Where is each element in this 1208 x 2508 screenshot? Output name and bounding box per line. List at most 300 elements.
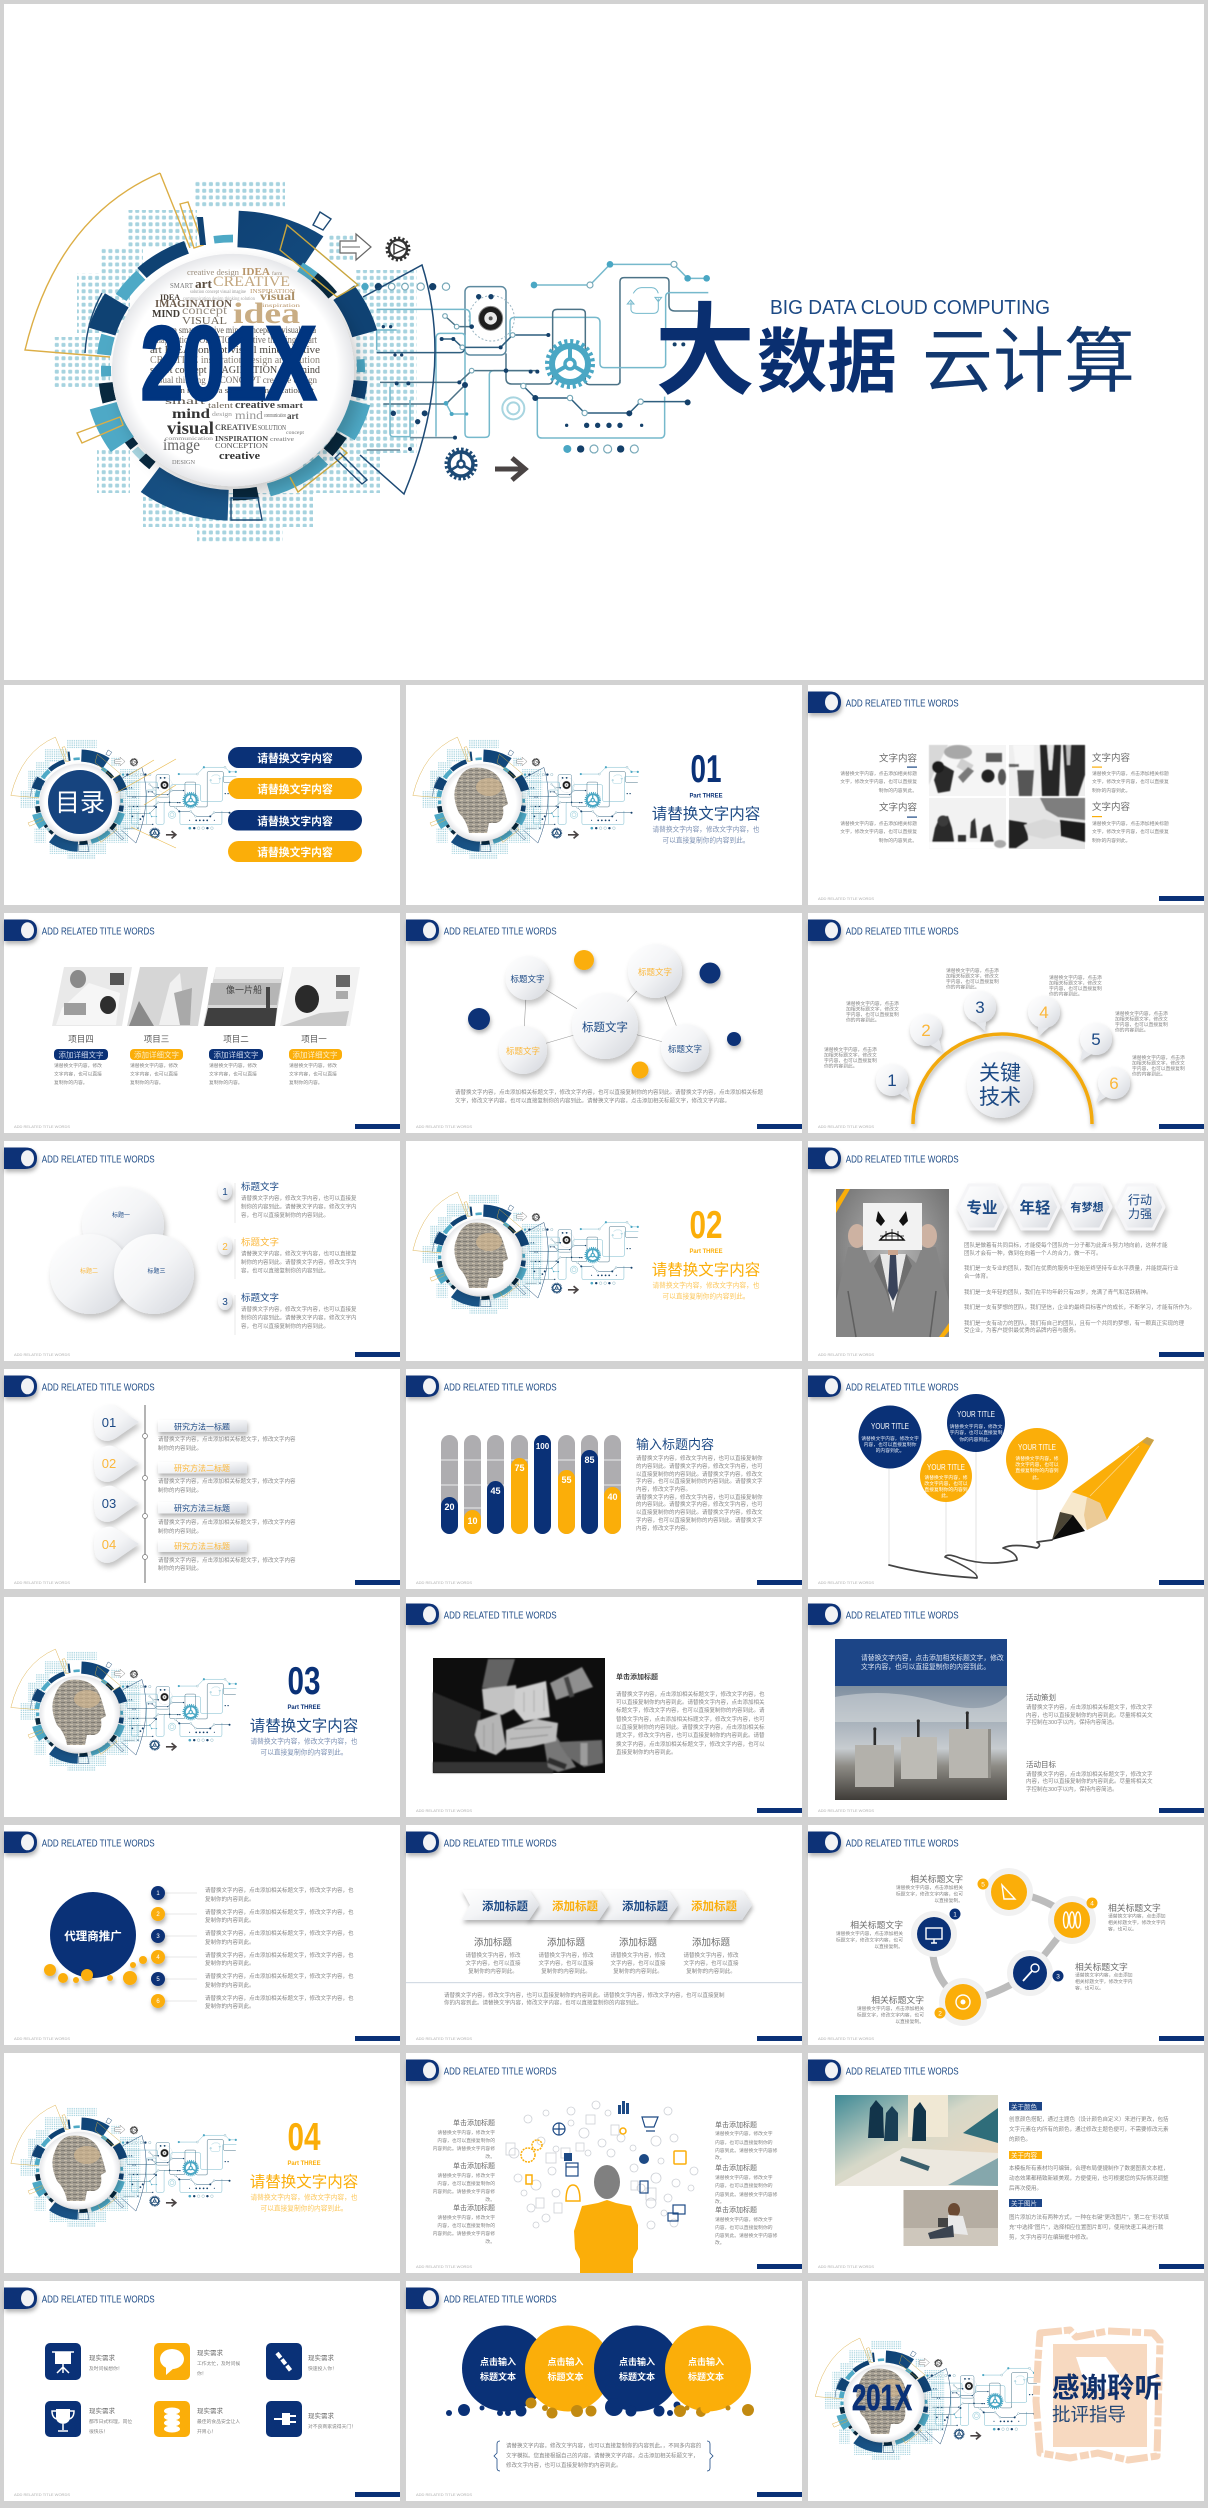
circle one: 标题一 [112, 1211, 130, 1219]
footer bar [355, 1124, 400, 1129]
word cloud: communication design thinking solution [183, 297, 255, 302]
chart paragraph: 字内容，也可以直接复制你的内容到此。请替换文字 [636, 1516, 763, 1524]
word cloud: IMAGINATION [155, 298, 232, 310]
icon cloud [506, 2101, 698, 2229]
label 5 [896, 1873, 963, 1904]
balloon text 1: 字内容，也可以直接复制 [824, 1057, 877, 1064]
label 5: 请替换文字内容，点击添加相关 [896, 1884, 963, 1891]
left text 1: 改。 [485, 2153, 495, 2160]
balloon text 2 [846, 1000, 899, 1024]
left text 2: 内容到此。请替换文字内容修 [433, 2188, 495, 2195]
list item 6: 6 [156, 1999, 160, 2005]
left text 2: 改。 [485, 2196, 495, 2203]
slide 1: contents [4, 685, 400, 905]
footer bar [1159, 1124, 1204, 1129]
photo: office silhouettes [835, 2095, 998, 2186]
project 2: 文字内容，也可以直接 [130, 1070, 178, 1078]
contents pill 2 [228, 778, 362, 799]
right text 1: 内容，也可以直接复制你的 [715, 2139, 773, 2146]
project 3: 项目二 [223, 1034, 249, 1044]
paragraph 1 [1009, 2115, 1169, 2143]
balloon text 3: 你的内容到此。 [946, 984, 980, 990]
right text block 1: 制你的内容到此。 [1092, 787, 1130, 794]
tag 01 [94, 1405, 139, 1441]
list item 1: 1 [156, 1891, 160, 1897]
footer text: ADD RELATED TITLE WORDS [416, 1809, 473, 1813]
word cloud: smart concept IMAGINATION idea mind [150, 365, 320, 376]
project 4: 文字内容，也可以直接 [289, 1070, 337, 1078]
right text block 2: 制你的内容到此。 [1092, 837, 1130, 844]
footer text: ADD RELATED TITLE WORDS [818, 2265, 875, 2269]
header title: ADD RELATED TITLE WORDS [846, 1382, 959, 1394]
bar chart: 55 [561, 1475, 572, 1485]
word cloud: concept [182, 303, 228, 317]
node 2: 2 [938, 2010, 942, 2018]
paragraph [616, 1690, 765, 1756]
circle title 1: 内容，也可以直接复制你 [864, 1441, 917, 1448]
slide 17: chevron process [406, 1825, 802, 2045]
bar chart: 45 [490, 1486, 501, 1496]
footer bar [757, 2036, 802, 2041]
left text 3: 单击添加标题 [453, 2203, 495, 2212]
balloon text 6: 字内容，也可以直接复制 [1132, 1065, 1185, 1072]
word cloud: art IDEA concept visual mind creative [150, 344, 320, 356]
circle labels: 点击输入 [547, 2356, 584, 2367]
need 4: 都市日式料理，岗位 [89, 2418, 132, 2425]
word cloud: INSPIRATION [215, 435, 268, 443]
paragraph [455, 1088, 764, 1104]
node 5: 5 [981, 1882, 985, 1888]
paragraph: 我们是一支年轻的团队，我们在平均年龄只有28岁，充满了青气和活跃精神。 [964, 1288, 1152, 1296]
column 2: 请替换文字内容，修改 [538, 1951, 594, 1959]
word cloud: concept [286, 430, 304, 436]
label 1: 相关标题文字 [850, 1919, 903, 1930]
method 2: 请替换文字内容，点击添加相关标题文字，修改文字内容 [158, 1477, 296, 1485]
project 1: 添加详细文字 [58, 1050, 104, 1060]
word cloud: solution concept visual imagine [190, 290, 247, 295]
word cloud: idea [233, 297, 300, 330]
thank you heading: 感谢聆听 [1052, 2372, 1162, 2403]
section title: 请替换文字内容 [652, 805, 760, 823]
right text 2: 请替换文字内容，修改文字 [715, 2174, 773, 2181]
circle one [82, 1187, 164, 1263]
header title: ADD RELATED TITLE WORDS [846, 698, 959, 710]
chevron 1 [462, 1890, 539, 1920]
word cloud: visual thinking art CONCEPT creative design [152, 375, 317, 385]
chart paragraph: 内容，修改文字内容。 [636, 1485, 691, 1493]
left text 3: 内容，也可以直接复制你的 [437, 2222, 495, 2229]
node 1 [911, 1908, 960, 1957]
person silhouette [574, 2165, 638, 2273]
word cloud: visual [167, 418, 214, 438]
left text 1: 内容到此。请替换文字内容修 [433, 2145, 495, 2152]
project 3: 添加详细文字 [214, 1050, 258, 1060]
method 4: 请替换文字内容，点击添加相关标题文字，修改文字内容 [158, 1556, 296, 1564]
text block: target: 字控制在300字以内，保持内容简洁。 [1026, 1785, 1118, 1793]
left text 1: 单击添加标题 [453, 2118, 495, 2127]
header title: ADD RELATED TITLE WORDS [846, 1154, 959, 1166]
project 2: 项目三 [144, 1034, 169, 1044]
word cloud: design [212, 412, 232, 418]
right text 1: 请替换文字内容，修改文字 [715, 2130, 773, 2137]
header [808, 2060, 841, 2081]
contents pill 1: 请替换文字内容 [257, 751, 333, 765]
title: 大数据 云计算: 数据 [757, 323, 897, 401]
footer text: ADD RELATED TITLE WORDS [14, 1125, 71, 1129]
word cloud: CREATIVE [213, 274, 290, 290]
label 1 [836, 1919, 903, 1950]
word cloud: design smart creative mind concept art visual idea [156, 325, 316, 335]
header [4, 2288, 37, 2309]
label 3: 相关标题文字，修改文字内 [1075, 1978, 1133, 1985]
circle labels: 点击输入 [688, 2356, 724, 2367]
circle two: 标题二 [80, 1267, 98, 1275]
header title: ADD RELATED TITLE WORDS [444, 1382, 557, 1394]
photo: pillars [835, 1686, 1007, 1800]
need 1 [89, 2353, 123, 2372]
hexagon: professional: 专业 [966, 1199, 998, 1217]
word cloud: SOLUTION [258, 424, 286, 432]
hero hub graphic [25, 173, 710, 543]
need 1: 及时问候想你！ [89, 2365, 123, 2372]
slide 12: pencil and circles [808, 1369, 1204, 1589]
header title: ADD RELATED TITLE WORDS [444, 2066, 557, 2078]
balloon text 1: 加相关标题文字，修改文 [824, 1052, 877, 1058]
tag: about pictures [1009, 2199, 1042, 2208]
footer text: ADD RELATED TITLE WORDS [818, 1809, 875, 1813]
footer bar [757, 2492, 802, 2497]
method 3: 制你的内容到此。 [158, 1527, 202, 1535]
word cloud: talent [208, 401, 234, 410]
paragraph: 你的内容到此。请替换文字内容，修改文字内容，也可以直接复制你的内容到此。 [444, 1998, 642, 2006]
slide 22: six icon needs [4, 2281, 400, 2501]
circle title 4: 此。 [1032, 1474, 1042, 1481]
left text block 1: 制你的内容到此。 [879, 787, 917, 794]
method 1: 制你的内容到此。 [158, 1444, 202, 1452]
list item 4: 4 [156, 1955, 160, 1961]
header [406, 1604, 439, 1625]
bubble top right: 标题文字 [638, 967, 672, 977]
header [4, 920, 37, 941]
head word cloud [52, 2136, 106, 2201]
contents pill 2: 请替换文字内容 [257, 782, 333, 796]
method 3: 请替换文字内容，点击添加相关标题文字，修改文字内容 [158, 1518, 296, 1526]
need 3: 快速投入你！ [308, 2365, 337, 2372]
contents pill 1 [228, 747, 362, 768]
circle labels [480, 2356, 724, 2382]
center key technology bubble: 技术 [979, 1086, 1021, 1109]
balloon 6 [1096, 1067, 1130, 1103]
need 5: 开胃心！ [197, 2428, 216, 2435]
section text [652, 1280, 760, 1300]
item 2 [218, 1236, 357, 1279]
right text 3: 内容到此。请替换文字内容修 [715, 2232, 778, 2239]
balloon 3: 3 [975, 998, 985, 1017]
footer text: ADD RELATED TITLE WORDS [416, 2493, 473, 2497]
item 3: 请替换文字内容，修改文字内容，也可以直接复 [241, 1305, 357, 1313]
header [808, 1376, 841, 1397]
contents pill 4: 请替换文字内容 [257, 845, 333, 859]
paragraph: 请替换文字内容，修改文字内容，也可以直接复制你的内容到此。请替换文字内容，修改文字内容，也可以直接复制 [444, 1991, 725, 1999]
column 2 [538, 1936, 594, 1975]
chevron 1: 添加标题 [482, 1899, 528, 1913]
bubble bottom right: 标题文字 [668, 1044, 702, 1054]
label 3: 请替换文字内容，点击添加 [1075, 1972, 1133, 1978]
contents pill 3: 请替换文字内容 [257, 814, 333, 828]
list item 6: 复制你的内容到此。 [205, 2002, 255, 2010]
right text 2: 内容，也可以直接复制你的 [715, 2182, 773, 2189]
left text block 2 [840, 802, 917, 844]
section number: 01 [690, 748, 722, 791]
method 3: 研究方法三标题 [174, 1503, 230, 1513]
slide 10: research methods timeline [4, 1369, 400, 1589]
circle title 2: 你的内容到此。 [959, 1436, 993, 1443]
need 2: 你！ [197, 2370, 207, 2377]
header [4, 1832, 37, 1853]
right text 2: 内容到此。请替换文字内容修 [715, 2191, 778, 2198]
header title: ADD RELATED TITLE WORDS [42, 1838, 155, 1850]
balloon text 4: 请替换文字内容，点击添 [1049, 974, 1102, 981]
bar chart: 100 [536, 1442, 550, 1451]
chevron 4 [666, 1890, 752, 1920]
chevron 2: 添加标题 [552, 1899, 598, 1913]
section number: 02 [690, 1204, 722, 1247]
hexagon: dreams [1063, 1185, 1111, 1229]
bracket text: 修改文字内容，也可以直接复制你的内容到此。 [506, 2461, 622, 2469]
tag: about content: 关于内容 [1011, 2151, 1038, 2160]
method 4: 制你的内容到此。 [158, 1564, 202, 1572]
header title: ADD RELATED TITLE WORDS [846, 926, 959, 938]
slanted photo 2 [127, 967, 208, 1026]
project 2: 请替换文字内容，修改 [130, 1062, 178, 1069]
paragraph 2: 后再次使用。 [1009, 2184, 1042, 2192]
word cloud: solution mind idea smart communication art [156, 386, 315, 395]
column 1: 请替换文字内容，修改 [465, 1951, 521, 1959]
hexagon: young [1011, 1185, 1059, 1229]
right text block 2 [1092, 801, 1169, 844]
item 1: 请替换文字内容，修改文字内容，也可以直接复 [241, 1194, 357, 1202]
column 4: 请替换文字内容，修改 [683, 1951, 739, 1959]
bar chart: 20 [444, 1502, 455, 1512]
text block: planning: 内容，也可以直接复制你的内容到此。尽量将相关文 [1026, 1711, 1153, 1719]
left text 2: 内容，也可以直接复制你的 [437, 2180, 495, 2187]
left text 1: 内容，也可以直接复制你的 [437, 2137, 495, 2144]
node 2 [934, 1978, 987, 2026]
text title: 单击添加标题 [616, 1672, 658, 1681]
gold dots [44, 1956, 147, 1985]
text block: planning [1026, 1692, 1153, 1726]
footer bar [757, 1808, 802, 1813]
header [406, 920, 439, 941]
balloon text 2: 加相关标题文字，修改文 [846, 1006, 899, 1012]
bubble top left: 标题文字 [510, 974, 545, 984]
header [808, 692, 841, 713]
paragraph 2 [1009, 2164, 1169, 2192]
slide 15: activity planning [808, 1597, 1204, 1817]
bubble top right [628, 944, 682, 998]
footer bar [757, 1580, 802, 1585]
icon: speech bubble [154, 2343, 190, 2380]
item 1: 标题文字 [241, 1181, 279, 1193]
circle title 3: YOUR TITLE [927, 1463, 965, 1472]
list item 4: 复制你的内容到此。 [205, 1959, 255, 1967]
chart title: 输入标题内容 [636, 1437, 714, 1452]
circle title 3: 此。 [941, 1492, 951, 1499]
need 2: 工作太忙，及时问候 [197, 2360, 240, 2367]
chart paragraph: 的内容到此。请替换文字内容，修改文字内容，也可 [636, 1500, 763, 1508]
footer text: ADD RELATED TITLE WORDS [818, 2037, 875, 2041]
circle title 4: 改文字内容，也可以 [1015, 1461, 1059, 1468]
list item 5: 5 [156, 1977, 160, 1983]
word cloud: smart [277, 401, 303, 410]
footer bar [1159, 1808, 1204, 1813]
circle 3 [594, 2326, 680, 2412]
slanted photo 3 [203, 967, 284, 1026]
header title: ADD RELATED TITLE WORDS [846, 1610, 959, 1622]
bubble dots [446, 2398, 754, 2418]
circle title 4 [1006, 1428, 1068, 1490]
balloon text 4: 字内容，也可以直接复制 [1049, 985, 1102, 992]
circle labels: 点击输入 [480, 2356, 516, 2367]
footer text: ADD RELATED TITLE WORDS [416, 1125, 473, 1129]
column 1: 文字内容，也可以直接 [465, 1959, 521, 1967]
balloon text 5: 加相关标题文字，修改文 [1115, 1016, 1168, 1022]
label 1: 以直接复制。 [874, 1943, 903, 1950]
bubble bottom left: 标题文字 [506, 1046, 540, 1056]
node 3: 3 [1056, 1974, 1060, 1980]
header [406, 2288, 439, 2309]
need 1: 现实需求 [89, 2353, 116, 2362]
slide 13: part 03 [4, 1597, 400, 1817]
icon: trophy [45, 2401, 81, 2437]
footer bar [1159, 1352, 1204, 1357]
paragraph: 题文字，修改文字内容，也可以直接复制你的内容到此。请替 [616, 1731, 765, 1739]
connecting path [933, 1892, 1072, 2002]
circle title 3 [920, 1450, 972, 1502]
paragraph: 我们是一支有动力的团队，我们有自己的团队，且有一个共同的梦想，有一颗真正实现的理 [964, 1319, 1185, 1327]
list item 1: 请替换文字内容，点击添加相关标题文字，修改文字内容，也 [205, 1886, 354, 1894]
tag 03 [94, 1486, 139, 1522]
gold arch [913, 1034, 1092, 1124]
right text block 1: 文字内容 [1092, 752, 1131, 764]
hanging lines [889, 1452, 1037, 1576]
header title: ADD RELATED TITLE WORDS [444, 1838, 557, 1850]
footer bar [355, 1352, 400, 1357]
slide 7: three overlapping circles [4, 1141, 400, 1361]
circle title 3: 请替换文字内容，修 [924, 1474, 968, 1481]
paragraph: 受企业，为客户提供最优秀的品牌内容与服务。 [964, 1326, 1080, 1334]
connector lines [523, 971, 685, 1050]
column 1 [465, 1936, 521, 1975]
need 5: 现实需求 [197, 2406, 224, 2415]
tag 03: 03 [102, 1496, 116, 1511]
item 2: 2 [222, 1242, 228, 1253]
paragraph 1: 的颜色。 [1009, 2135, 1031, 2143]
label 3 [1075, 1961, 1133, 1992]
footer text: ADD RELATED TITLE WORDS [416, 2037, 473, 2041]
item 3 [218, 1292, 357, 1335]
footer text: ADD RELATED TITLE WORDS [14, 1353, 71, 1357]
right text block 1: 文字，修改文字内容，也可以直接复 [1092, 778, 1169, 785]
chevron 4: 添加标题 [691, 1899, 737, 1913]
word cloud: MIND [152, 309, 180, 320]
item 2: 请替换文字内容，修改文字内容，也可以直接复 [241, 1250, 357, 1258]
part label: Part THREE [690, 792, 723, 800]
contents pill 3 [228, 810, 362, 830]
slide 18: node path [808, 1825, 1204, 2045]
photo: meeting [929, 745, 1006, 796]
header title: ADD RELATED TITLE WORDS [444, 2294, 557, 2306]
column 2: 添加标题 [547, 1936, 585, 1948]
method 4: 研究方法三标题 [174, 1541, 230, 1551]
word cloud: IDEA [242, 266, 270, 278]
header title: ADD RELATED TITLE WORDS [846, 2066, 959, 2078]
balloon text 2: 字内容，也可以直接复制 [846, 1011, 899, 1018]
label 5: 标题文字，修改文字内容，也可 [896, 1890, 963, 1898]
word cloud: creative design [187, 268, 239, 277]
list item 6 [151, 1994, 354, 2010]
bar chart: 40 [607, 1492, 618, 1502]
left text 2: 请替换文字内容，修改文字 [437, 2172, 495, 2179]
label 2: 以直接复制。 [895, 2018, 924, 2025]
tag 04: 04 [102, 1537, 116, 1552]
hub graphic [413, 1192, 639, 1314]
circle three [114, 1234, 194, 1314]
hub graphic [11, 1649, 237, 1771]
header [4, 1148, 37, 1169]
brackets [494, 2441, 713, 2471]
circle title 3: 改文字内容，也可以 [924, 1480, 968, 1487]
label 4: 请替换文字内容，点击添加 [1108, 1912, 1166, 1920]
method 2: 研究方法二标题 [174, 1463, 230, 1473]
header [406, 1376, 439, 1397]
contents pill 4 [228, 841, 362, 862]
head word cloud [52, 1680, 106, 1745]
title: 大数据 云计算: 大 [655, 296, 755, 408]
chevron 3: 添加标题 [622, 1899, 668, 1913]
tag 02 [94, 1446, 139, 1482]
part label: Part THREE [288, 1704, 321, 1711]
method 2 [158, 1462, 296, 1494]
list item 3: 请替换文字内容，点击添加相关标题文字，修改文字内容，也 [205, 1929, 354, 1937]
right text 3: 单击添加标题 [715, 2205, 757, 2214]
header title: ADD RELATED TITLE WORDS [444, 1610, 557, 1622]
column 3: 文字内容，也可以直接 [610, 1959, 666, 1967]
project 1: 文字内容，也可以直接 [54, 1070, 102, 1078]
circle title 2 [947, 1394, 1005, 1452]
icon: presentation board [45, 2343, 81, 2380]
column 4: 添加标题 [692, 1936, 730, 1948]
hexagon: action: 行动 [1128, 1193, 1152, 1207]
squiggle line [889, 1540, 1052, 1578]
project 4 [289, 1034, 342, 1086]
text block: planning: 字控制在300字以内，保持内容简洁。 [1026, 1718, 1118, 1726]
word cloud: art [287, 411, 298, 421]
word cloud: creative [270, 437, 294, 443]
paragraph [964, 1241, 1195, 1334]
column 3: 请替换文字内容，修改 [610, 1951, 666, 1959]
need 6: 对不良商家说得天门！ [308, 2423, 356, 2430]
slide 24: thank you [808, 2281, 1204, 2501]
subheading: 批评指导 [1052, 2404, 1126, 2425]
project 2: 复制你的内容。 [130, 1079, 164, 1086]
right text 1: 单击添加标题 [715, 2120, 757, 2129]
hub graphic [11, 737, 237, 859]
list item 5 [151, 1972, 354, 1989]
need 6 [308, 2411, 356, 2430]
section text: 请替换文字内容，修改文字内容，也 [250, 1736, 358, 1746]
balloon 5 [1080, 1023, 1112, 1061]
